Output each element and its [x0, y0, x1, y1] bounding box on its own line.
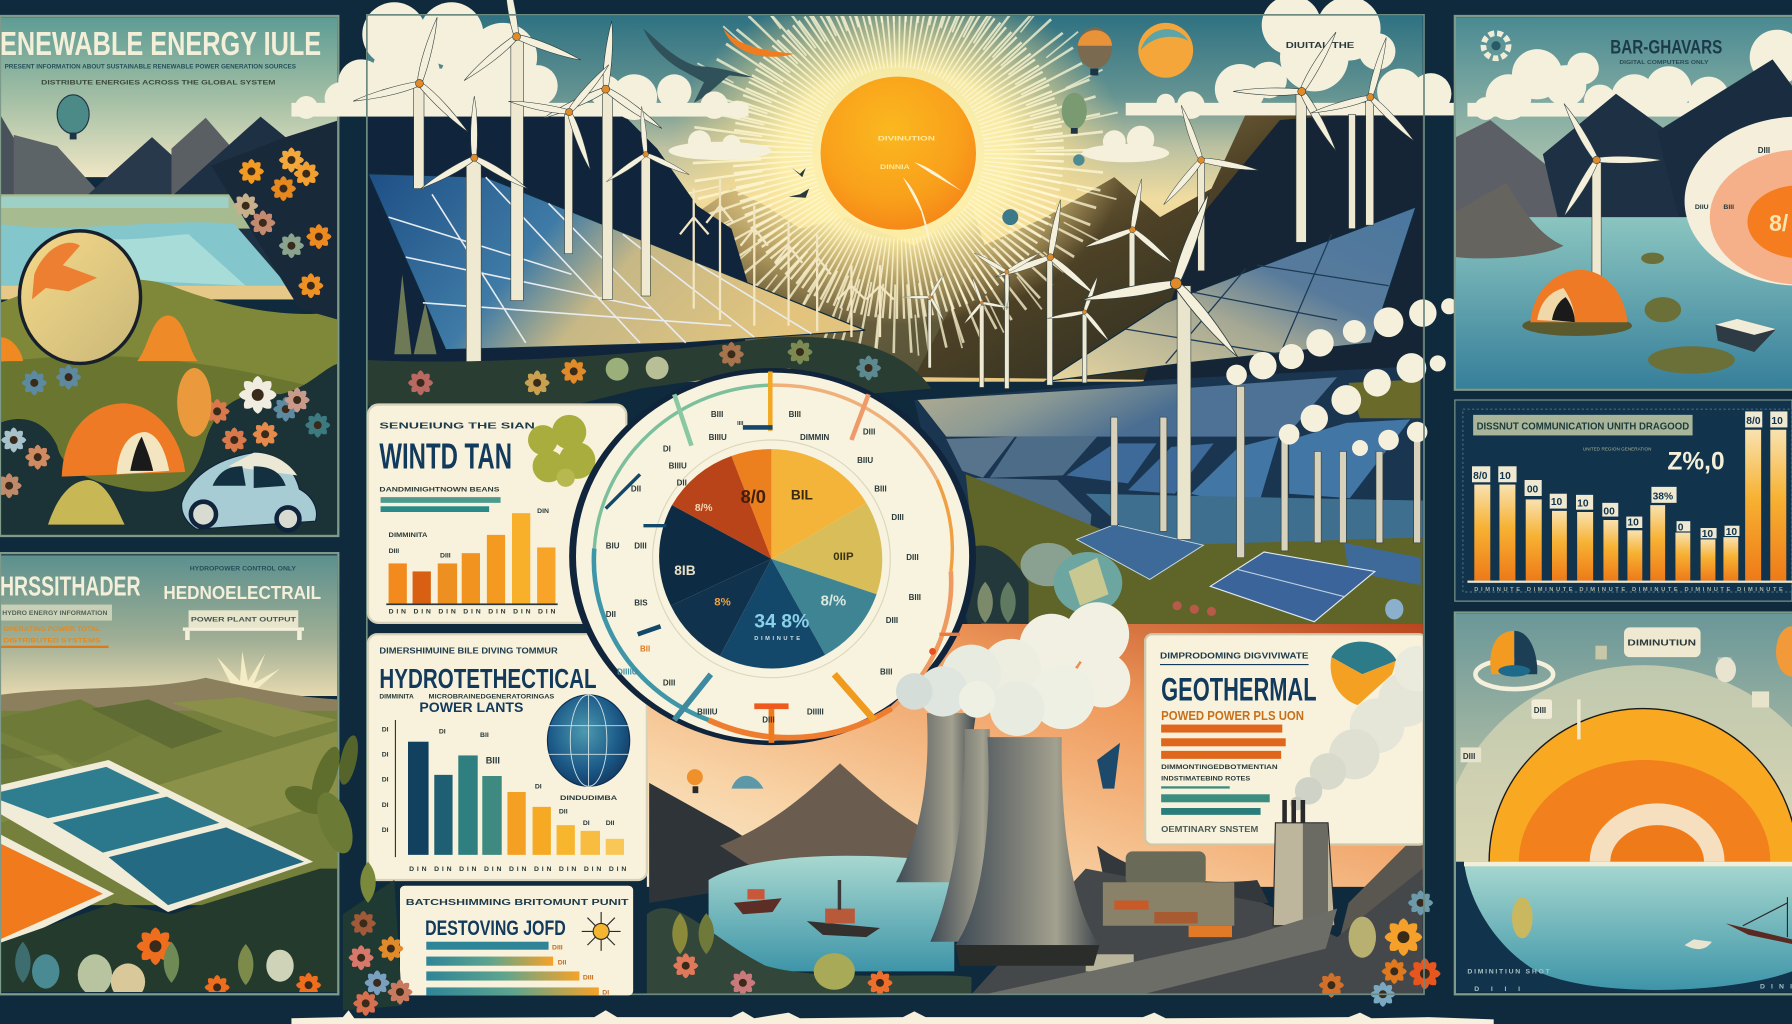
- panel frame: top left: [0, 16, 338, 536]
- lake and waterfall: [0, 194, 299, 299]
- hydro card bar chart: DI: [382, 726, 389, 733]
- solar array upper right: [1045, 207, 1416, 382]
- panel: hydro lake (top right): [1456, 17, 1792, 389]
- pie wedge red: [672, 456, 771, 559]
- icon: earth globe: DINDUDIMBA: [560, 795, 617, 802]
- small icons in sunset sky: [687, 743, 1406, 817]
- hydro card bar chart: DI: [535, 784, 542, 791]
- icon: gear: [1483, 33, 1509, 58]
- wheel ring labels: DI: [663, 444, 671, 453]
- hydro card title: HYDROTETHECTICAL: [379, 663, 597, 694]
- bar label numbers: [1473, 416, 1783, 540]
- bottom legend: DIMINITIUN SHOT: [1467, 969, 1551, 976]
- cooling tower three: [896, 713, 976, 882]
- panel: destoving card: [400, 886, 633, 996]
- destoving bars: DIII: [552, 945, 563, 952]
- destoving bars: DI: [602, 989, 609, 996]
- floating box: [1715, 319, 1776, 352]
- wind card bar chart: DIII: [440, 553, 451, 560]
- hydro card subtitle: POWER LANTS: [419, 700, 523, 715]
- wheel ring labels: BIIIU: [669, 462, 687, 471]
- hydro card subtitle: [379, 693, 555, 715]
- bar label numbers: 10: [1771, 416, 1783, 427]
- orange caption lines: [0, 626, 109, 648]
- pie wedge yellow: [771, 449, 866, 559]
- mountains and lake: [649, 763, 1423, 971]
- hydro card bar chart: DII: [606, 820, 615, 827]
- wheel ring labels: BII: [640, 644, 650, 653]
- gauge chart: BIII: [1723, 204, 1734, 211]
- mountains: [1, 116, 286, 276]
- bar label numbers: 38%: [1653, 491, 1673, 502]
- hills and flowers lower mid: [647, 908, 971, 997]
- clouds left: [291, 2, 771, 160]
- bar label numbers: 10: [1551, 497, 1563, 508]
- flower meadow: [15, 927, 322, 992]
- wheel ring labels: DIII: [634, 542, 647, 551]
- island mountain: [1456, 183, 1563, 258]
- pie wedge navy lower: [671, 559, 771, 656]
- panel: hydrothermal card: [368, 634, 647, 880]
- wheel ring labels: DII: [631, 484, 641, 493]
- vertical bars: [1474, 430, 1786, 581]
- pie labels: 8/%: [821, 594, 846, 610]
- speech label: [1624, 627, 1701, 657]
- wheel ring labels: BIII: [909, 593, 921, 602]
- icon: boats: [1512, 897, 1792, 949]
- geothermal text lines: DIMMONTINGEDBOTMENTIAN: [1161, 764, 1278, 771]
- geothermal text lines: INDSTIMATEBIND ROTES: [1161, 776, 1251, 783]
- panel frame: bottom right: [1455, 613, 1792, 994]
- icon: orange cone: [0, 315, 198, 361]
- icon: car: [182, 453, 317, 530]
- bottom legend: DINI: [1760, 984, 1792, 991]
- yellow valley: [702, 188, 984, 372]
- wheel ring labels: [606, 410, 921, 724]
- pie wedge teal: [771, 559, 877, 655]
- flowers by destoving card: [343, 862, 413, 1016]
- wind card bar chart: DIMMINITA: [389, 532, 427, 539]
- gauge chart: DIIU: [1695, 204, 1709, 211]
- water bowl background: [1456, 862, 1792, 992]
- sun: DIVINUTION: [878, 136, 935, 143]
- bar label numbers: 10: [1726, 527, 1737, 538]
- geothermal text lines: [1161, 764, 1278, 783]
- bar label numbers: 8/0: [1746, 416, 1761, 427]
- bar label numbers: 10: [1577, 498, 1589, 509]
- flowers lower right: [1319, 890, 1441, 1007]
- wind card bar chart: DIII: [389, 548, 399, 555]
- heading: BAR-GHAVARS: DIGITAL COMPUTERS ONLY: [1619, 60, 1709, 66]
- smokestacks: [1111, 386, 1421, 558]
- sun: [821, 77, 976, 265]
- bar chart value: Z%,0: [1667, 448, 1725, 476]
- icon: olive circles: [528, 415, 595, 487]
- torn paper strip at bottom: [291, 1010, 1494, 1024]
- icon: balloons: [1002, 23, 1193, 225]
- pie wedge blue: [720, 559, 825, 669]
- bar label numbers: 8/0: [1473, 471, 1488, 482]
- wind card text and horizontal bars: DANDMINIGHTNOWN BEANS: [379, 486, 500, 493]
- rocks and small island: [1641, 253, 1735, 374]
- bar labels: [1472, 411, 1787, 538]
- wheel ring labels: DIII: [886, 616, 898, 625]
- heading: hydroelectric: HYDROPOWER CONTROL ONLY: [190, 565, 296, 572]
- hydro card subheading: DIMERSHIMUINE BILE DIVING TOMMUR: [379, 647, 558, 656]
- heading: hydroelectric: HEDNOELECTRAIL: [163, 582, 321, 603]
- wheel ring labels: DIIIII: [807, 707, 824, 716]
- title: ENEWABLE ENERGY IULE: [0, 26, 321, 63]
- pie wedge orange: [731, 449, 771, 559]
- icon: balloon globe: [57, 95, 89, 139]
- gauge chart: 8/: [1769, 210, 1789, 236]
- bar chart value: [1583, 446, 1725, 476]
- orange caption lines: DISTRIBUTED SYSTEMS: [3, 637, 101, 644]
- panel frame: top right: [1455, 16, 1792, 390]
- wheel ring labels: DIII: [762, 715, 775, 724]
- plant overlapping left frame: [281, 734, 362, 858]
- title subtitle lines: [5, 64, 296, 84]
- orange caption lines: OPERATING POWER TOTAL: [3, 626, 101, 633]
- bar label numbers: 10: [1627, 518, 1639, 529]
- gauge chart: DIII: [1758, 146, 1770, 155]
- mountains: [1456, 59, 1792, 269]
- wheel tick markers: [606, 371, 960, 743]
- panel: central lower scene: [647, 543, 1440, 997]
- distant hills: [1, 678, 337, 711]
- hydro card bar chart: DIN DIN DIN DIN DIN DIN DIN DIN DIN: [409, 866, 626, 873]
- geothermal chimney: [1273, 800, 1335, 926]
- corn cone: [177, 368, 211, 437]
- hydro card bar chart: [382, 720, 626, 873]
- wheel ring labels: BIII: [711, 410, 723, 419]
- x axis: DIMINUTE DIMINUTE DIMINUTE DIMINUTE DIMINUTE DIMINUTE: [1474, 587, 1783, 593]
- bar chart title: [1473, 415, 1693, 435]
- ships: [734, 880, 880, 937]
- panel: solar half-disc (bottom right): [1440, 614, 1792, 1024]
- wheel coloured ring segments: [594, 385, 952, 738]
- bar label numbers: 10: [1499, 471, 1511, 482]
- dark flower bed: [0, 363, 339, 537]
- heading: BAR-GHAVARS: [1610, 37, 1722, 66]
- large wind turbine: [1078, 164, 1290, 539]
- clouds right: [1082, 0, 1463, 162]
- hydro card bar chart: DI: [382, 802, 389, 809]
- destoving bars: [426, 942, 609, 996]
- hydro card bar chart: BII: [480, 732, 489, 739]
- bottom legend: DIII: [1474, 986, 1520, 993]
- gauge chart: [1685, 117, 1792, 286]
- wheel ring labels: BIIU: [857, 456, 873, 465]
- pie wedge navy upper: [659, 505, 771, 606]
- wind turbines right: [902, 1, 1440, 389]
- wind card subheading: SENUEIUNG THE SIAN: [379, 422, 535, 431]
- wheel ring labels: DIII: [906, 553, 919, 562]
- bar label numbers: 00: [1527, 485, 1539, 496]
- wheel ring labels: BIU: [606, 542, 620, 551]
- road: [985, 909, 1337, 994]
- icon: bench sign: POWER PLANT OUTPUT: [191, 617, 297, 624]
- pie labels: 0IIP: [833, 551, 854, 563]
- small labels: [1461, 626, 1792, 762]
- wheel ring labels: BIIIIU: [697, 707, 718, 716]
- bar label numbers: 10: [1702, 529, 1713, 540]
- geothermal subtitle: POWED POWER PLS UON: [1161, 709, 1304, 723]
- ground foliage: [0, 869, 337, 994]
- wheel ring labels: DII: [606, 610, 616, 619]
- icon: tent: [62, 403, 185, 477]
- hydro card subtitle: MICROBRAINEDGENERATORINGAS: [429, 693, 555, 700]
- wheel ring labels: BIII: [880, 667, 892, 676]
- panel: hydroelectric fields (bottom left): [0, 553, 337, 1000]
- wheel ring labels: DIII: [891, 513, 904, 522]
- sun outer disc: [1489, 709, 1792, 1015]
- power plant buildings: [1086, 851, 1234, 971]
- destoving bars: DIII: [583, 974, 594, 981]
- bar label numbers: 00: [1603, 506, 1615, 517]
- geothermal bars teal: [1161, 786, 1270, 815]
- earth globes and forest: [968, 543, 1122, 624]
- pie labels: 8/0: [741, 486, 766, 507]
- meadow left: [368, 274, 931, 406]
- heading: HRSSITHADER: HRSSITHADER: [0, 570, 141, 601]
- hydro card bar chart: DI: [583, 820, 590, 827]
- solar panel teal: [0, 760, 313, 912]
- smoke trails: [1226, 298, 1457, 456]
- icon: globe: [19, 231, 141, 363]
- clouds: [1467, 30, 1792, 120]
- wheel ring labels: DIII: [863, 427, 875, 436]
- steam clouds: [896, 602, 1130, 736]
- wheel inner circle: [653, 440, 890, 678]
- water: [1456, 217, 1792, 389]
- pie labels: BIL: [791, 487, 813, 502]
- wheel ring labels: DIMMIN: [800, 433, 830, 442]
- yellow mound: [48, 480, 125, 525]
- icon: tent on island: [1522, 270, 1632, 336]
- panel: wind statistics card: [368, 405, 626, 623]
- geothermal footer: OEMTINARY SNSTEM: [1161, 825, 1259, 834]
- heading: BAR-GHAVARS: BAR-GHAVARS: [1610, 37, 1722, 59]
- dark mountains right: [914, 109, 1423, 383]
- lower sky sunset: [647, 624, 1424, 887]
- hydro card bar chart: DI: [382, 827, 389, 834]
- fields: [0, 697, 337, 905]
- heading: hydroelectric: [164, 566, 321, 599]
- bottom legend: [1467, 969, 1792, 993]
- destoving subheading: BATCHSHIMMING BRITOMUNT PUNIT: [406, 898, 629, 907]
- wind turbine: [1514, 74, 1665, 277]
- small labels: DIII: [1463, 752, 1475, 761]
- green hill: [0, 279, 339, 537]
- halo rings: [1440, 665, 1792, 1024]
- icon: bench sign: [183, 610, 304, 640]
- solar panel orange: [0, 834, 114, 949]
- sun inner core: [1610, 825, 1704, 898]
- pie labels: [674, 486, 854, 642]
- industrial ground: [971, 869, 1423, 994]
- geothermal heading small: DIMPRODOMING DIGVIVIWATE: [1160, 651, 1309, 660]
- panel frame: bottom left: [0, 553, 338, 994]
- title subtitle lines: DISTRIBUTE ENERGIES ACROSS THE GLOBAL SYSTEM: [41, 80, 276, 87]
- pie labels: 34 8%: [754, 610, 809, 632]
- pie labels: 8/%: [695, 503, 713, 514]
- wheel ring labels: DII: [677, 479, 687, 488]
- icon: earth globe: [547, 695, 630, 802]
- sun: DINNIA: [880, 164, 910, 171]
- panel frame: center: [367, 15, 1424, 994]
- geothermal title: GEOTHERMAL: [1161, 672, 1317, 708]
- icon: rising sun rays: [217, 651, 280, 688]
- bar chart title: DISSNUT COMMUNICATION UNITH DRAGOOD: [1477, 422, 1689, 433]
- pie wedge tan: [771, 503, 882, 594]
- hydro card bar chart: DII: [559, 809, 568, 816]
- dark backdrop left: [368, 116, 748, 362]
- hydro card bar chart: DI: [382, 777, 389, 784]
- sun glow: [684, 16, 1117, 320]
- bar label numbers: 0: [1678, 522, 1684, 533]
- water: [1464, 862, 1792, 990]
- wheel ring labels: BIII: [874, 484, 887, 493]
- hydro card bar chart: DI: [439, 729, 446, 736]
- wheel ring labels: BIII: [789, 410, 801, 419]
- wind card bar chart: [386, 508, 558, 616]
- flowers: [0, 365, 330, 498]
- wheel ring labels: BIIIU: [709, 433, 727, 442]
- caption box: [0, 605, 112, 621]
- hydro card bar chart: BIII: [486, 755, 500, 765]
- icon: birds: [643, 29, 809, 198]
- panel: bar chart (middle right): [1455, 400, 1792, 601]
- wind card text and horizontal bars: [379, 486, 501, 512]
- wheel ring labels: DIIIIU: [617, 667, 638, 676]
- hydro card bar chart: DI: [382, 752, 389, 759]
- pie labels: DIMINUTE: [754, 636, 800, 642]
- pie labels: 8IB: [674, 563, 696, 578]
- wind card bar chart: DIN: [537, 508, 549, 515]
- horizon reflection: [1464, 862, 1792, 866]
- wind card title: WINTD TAN: [379, 436, 512, 477]
- sun cream ring: [1590, 803, 1725, 920]
- pie labels: 8%: [714, 597, 731, 609]
- speech label: DIMINUTIUN: [1627, 639, 1696, 648]
- geothermal bars orange: [1161, 725, 1286, 759]
- wind card bar chart: DIN DIN DIN DIN DIN DIN DIN: [389, 609, 555, 616]
- wheel ring labels: DIII: [663, 679, 675, 688]
- small labels: DIII: [1534, 706, 1546, 715]
- flowering bushes: [211, 120, 339, 320]
- wheel ring labels: BIS: [634, 599, 648, 608]
- title subtitle lines: PRESENT INFORMATION ABOUT SUSTAINABLE RENEWABLE POWER GENERATION SOURCES: [5, 64, 296, 71]
- lower solar field: [914, 366, 1429, 640]
- hydro card subtitle: DIMMINITA: [379, 693, 414, 700]
- solar array left: [368, 174, 865, 350]
- panel: central energy scene sky: [368, 0, 1423, 389]
- sun mid disc: [1519, 760, 1770, 963]
- destoving bars: DII: [558, 960, 567, 967]
- caption box: HYDRO ENERGY INFORMATION: [2, 610, 107, 617]
- geothermal panel card: [1145, 634, 1426, 845]
- sun ray burst: [695, 0, 1102, 336]
- panel: central wheel chart: [569, 368, 976, 745]
- small cloud caption: DIUITAL THE: [1286, 41, 1355, 50]
- destoving title: DESTOVING JOFD: [425, 915, 566, 940]
- cooling tower two: [930, 729, 1006, 942]
- panel: renewable energy landscape (top left): [0, 17, 339, 537]
- small distant turbines: [680, 177, 894, 337]
- wheel ring labels: IIII: [737, 421, 744, 427]
- cooling tower one: [955, 737, 1099, 966]
- bar chart value: UNITED REGION GENERATION: [1583, 446, 1651, 451]
- wind turbines left: [351, 0, 691, 377]
- icon: pie badge: [1475, 631, 1553, 689]
- geothermal pie: [1331, 642, 1397, 705]
- geothermal smoke: [1290, 646, 1440, 810]
- icon: small sun: [582, 912, 621, 951]
